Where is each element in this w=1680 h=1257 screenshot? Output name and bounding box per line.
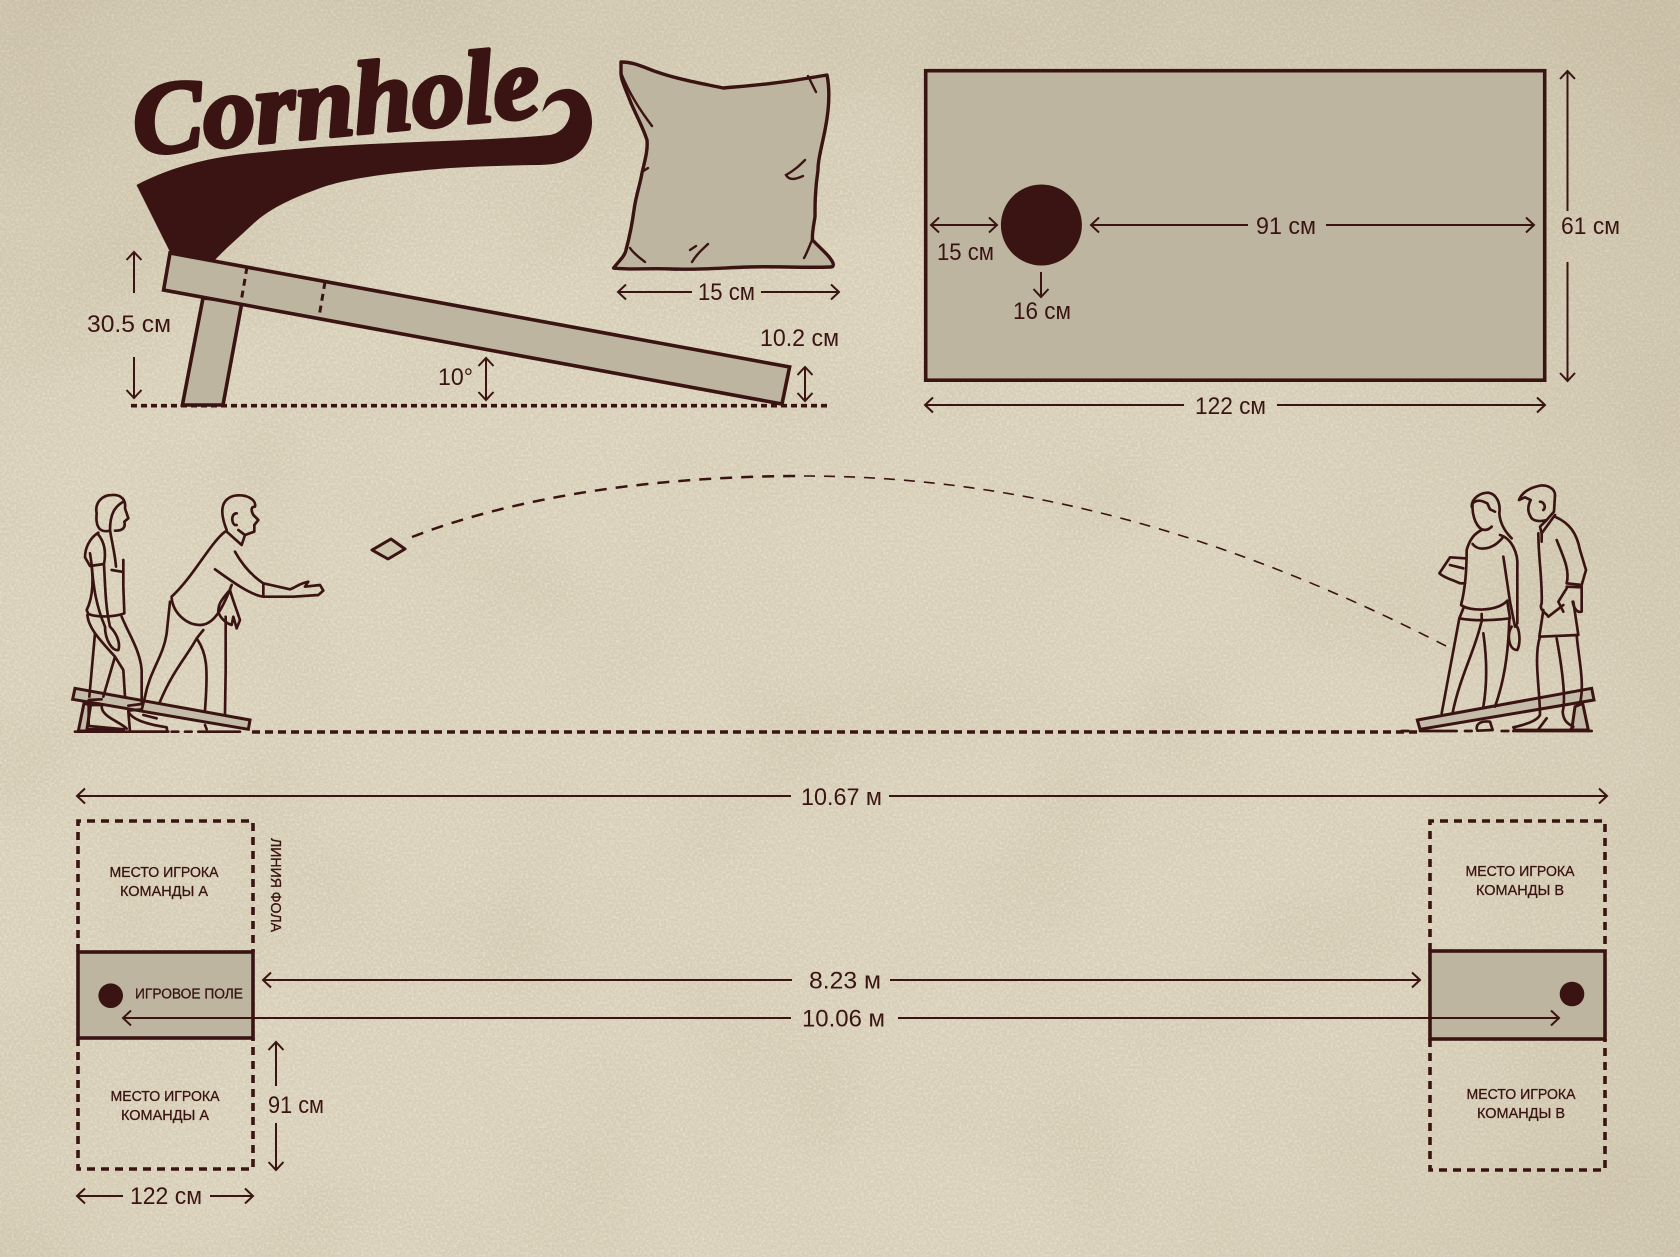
throw trajectory (412, 476, 1446, 646)
dimension: 15 cm edge (931, 225, 997, 266)
dimension: 10.06 m: 10.06 м (802, 1006, 885, 1032)
dimension: 122 cm: 122 см (1195, 393, 1266, 420)
player zone lower right: МЕСТО ИГРОКА (1466, 1086, 1576, 1103)
board zone left: ИГРОВОЕ ПОЛЕ (135, 986, 243, 1002)
dimension: 10.67 m: 10.67 м (801, 784, 882, 811)
player zone lower left: МЕСТО ИГРОКА (110, 1088, 220, 1105)
dimension: 10 degrees (438, 358, 486, 400)
panel: bean bag (614, 62, 839, 306)
dimension: 8.23 m: 8.23 м (809, 968, 881, 994)
dimension: 16 cm (1013, 272, 1071, 325)
ground line (252, 730, 1420, 734)
sloped board (164, 253, 790, 404)
player zone lower right: КОМАНДЫ В (1477, 1105, 1565, 1122)
left players (73, 495, 323, 732)
panel: court right side (1430, 821, 1605, 1170)
dimension: 91 cm: 91 см (1256, 213, 1316, 240)
icon: flying bag (372, 539, 405, 559)
dimension: 91 cm: 91 см (268, 1092, 324, 1119)
left woman (85, 495, 167, 732)
dimension: 10.2 cm (760, 325, 839, 401)
player zone lower left: КОМАНДЫ А (121, 1107, 209, 1124)
board zone left (78, 952, 253, 1038)
player zone lower right (1430, 1039, 1605, 1170)
hole (1001, 184, 1082, 266)
right players (1402, 486, 1594, 731)
dimension: 91 cm (268, 1042, 324, 1170)
title swash (136, 89, 592, 262)
player zone upper right: КОМАНДЫ В (1476, 882, 1564, 899)
dimension: 122 cm: 122 см (130, 1183, 202, 1210)
board surface (926, 71, 1545, 380)
board leg (182, 298, 242, 405)
dimension: 15 cm: 15 см (698, 279, 755, 306)
player zone lower left (78, 1038, 253, 1169)
left man throwing (142, 495, 323, 729)
left board (73, 688, 250, 732)
panel: court left side (77, 821, 324, 1210)
ground line (131, 404, 831, 408)
panel: board side view with title (87, 25, 839, 406)
dimension: 30.5 cm: 30.5 см (87, 311, 171, 338)
title: Cornhole (127, 25, 544, 178)
dimension: 10.2 cm: 10.2 см (760, 325, 839, 352)
dimension: 15 cm edge: 15 см (937, 239, 994, 266)
right man (1513, 486, 1586, 730)
player zone upper left: КОМАНДЫ А (120, 883, 208, 900)
player zone upper right (1430, 821, 1605, 951)
panel: board top view (925, 71, 1620, 420)
dimension: 16 cm: 16 см (1013, 298, 1071, 325)
hidden brace lines (241, 267, 325, 317)
right board (1402, 688, 1594, 731)
icon: bag (614, 62, 833, 269)
player zone upper right: МЕСТО ИГРОКА (1466, 863, 1574, 880)
board zone right (1430, 951, 1605, 1039)
dimension: 61 cm: 61 см (1561, 213, 1620, 240)
player zone upper left (78, 821, 253, 952)
player zone upper left: МЕСТО ИГРОКА (110, 864, 218, 881)
foul line label: ЛИНИЯ ФОЛА (267, 838, 284, 932)
dimension: 10 degrees: 10° (438, 364, 473, 391)
panel: throw scene (73, 476, 1594, 732)
right woman (1439, 493, 1519, 731)
